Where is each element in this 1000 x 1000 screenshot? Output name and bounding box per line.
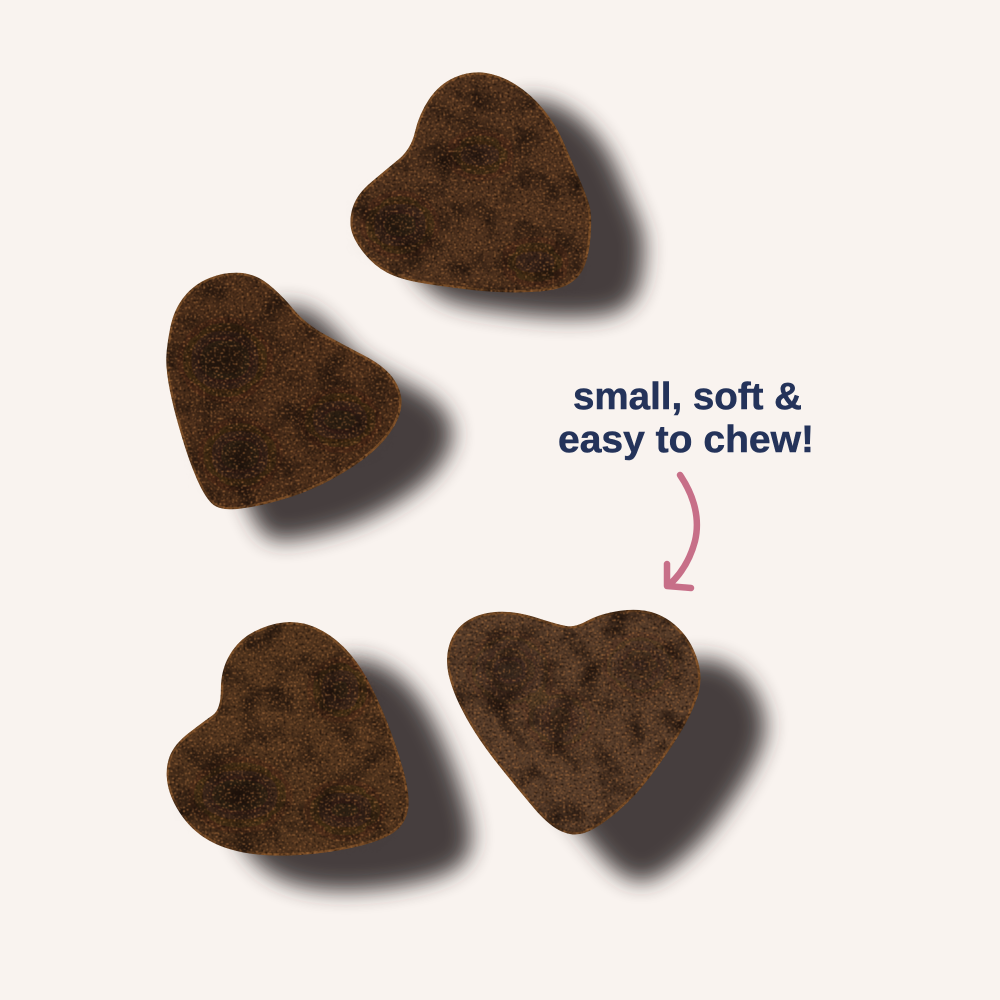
heart treat: bottom left <box>168 623 407 854</box>
heart treat: bottom right <box>448 611 699 833</box>
heart treat: left <box>167 274 400 508</box>
callout text: easy to chew! <box>558 419 814 461</box>
callout text <box>558 376 814 461</box>
heart treat: top <box>352 74 590 291</box>
callout text: small, soft & <box>573 376 802 418</box>
arrow: pointing to treat <box>667 475 697 588</box>
treat shadows <box>219 100 765 890</box>
